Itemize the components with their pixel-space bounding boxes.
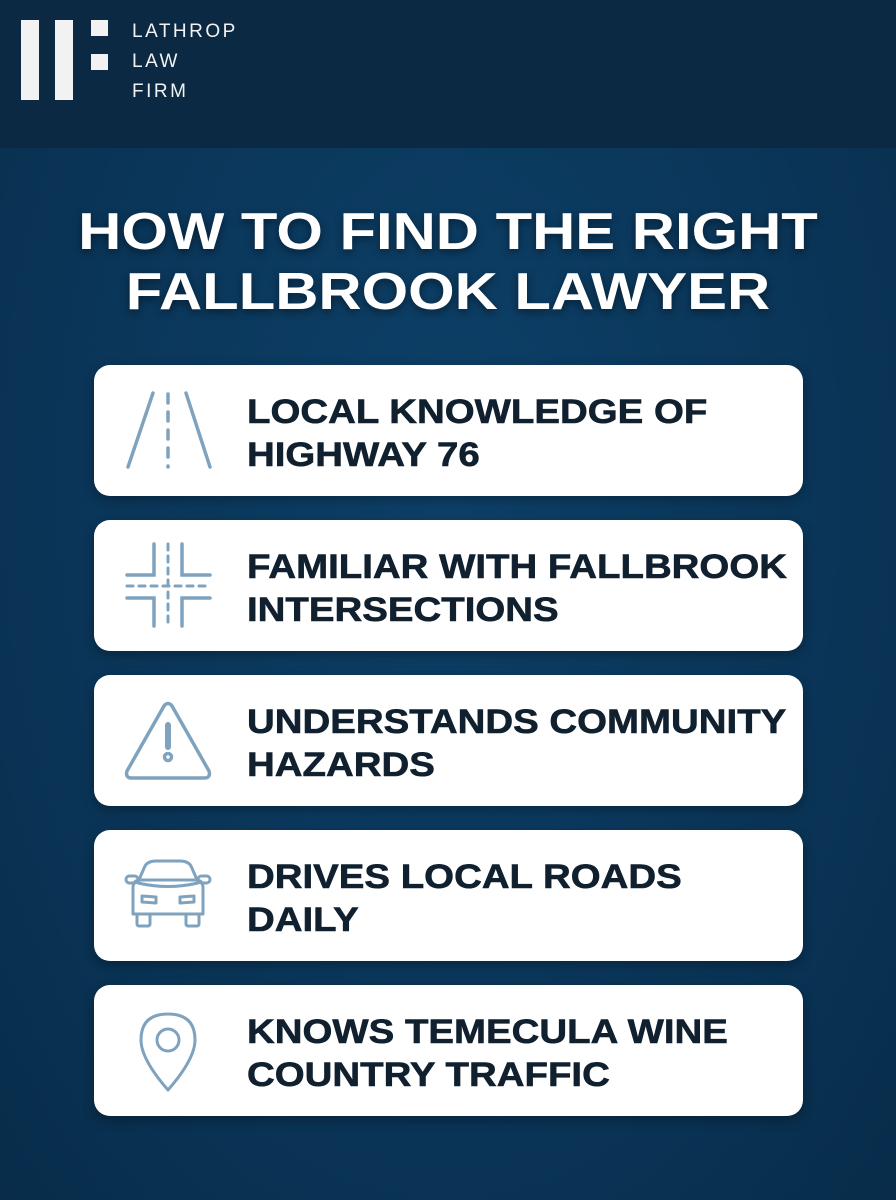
card: local roads [94,830,803,961]
text: FAMILIAR WITH FALLBROOK [247,548,787,586]
card: intersections [94,520,803,651]
card: highway 76 [94,365,803,496]
text: DAILY [247,901,359,939]
title [78,203,818,321]
text: DRIVES LOCAL ROADS [247,858,682,896]
text [247,703,786,784]
logo: LATHROP [132,21,238,42]
title: FALLBROOK LAWYER [126,263,770,321]
logo [21,20,238,102]
text [247,393,707,474]
text: LOCAL KNOWLEDGE OF [247,393,707,431]
icon: road [126,391,212,469]
icon: intersection [125,542,212,628]
text: HIGHWAY 76 [247,436,480,474]
card: wine country [94,985,803,1116]
text: INTERSECTIONS [247,591,559,629]
text [247,548,788,629]
text [247,1013,728,1094]
icon: map pin [140,1012,196,1092]
text [247,858,682,939]
logo: LAW [132,51,180,72]
card: hazards [94,675,803,806]
text: KNOWS TEMECULA WINE [247,1013,728,1051]
header band [0,0,896,148]
text: COUNTRY TRAFFIC [247,1056,610,1094]
logo: FIRM [132,81,188,102]
text: HAZARDS [247,746,435,784]
text: UNDERSTANDS COMMUNITY [247,703,786,741]
title: HOW TO FIND THE RIGHT [78,203,818,261]
icon: warning [124,702,212,780]
icon: car [124,860,212,928]
